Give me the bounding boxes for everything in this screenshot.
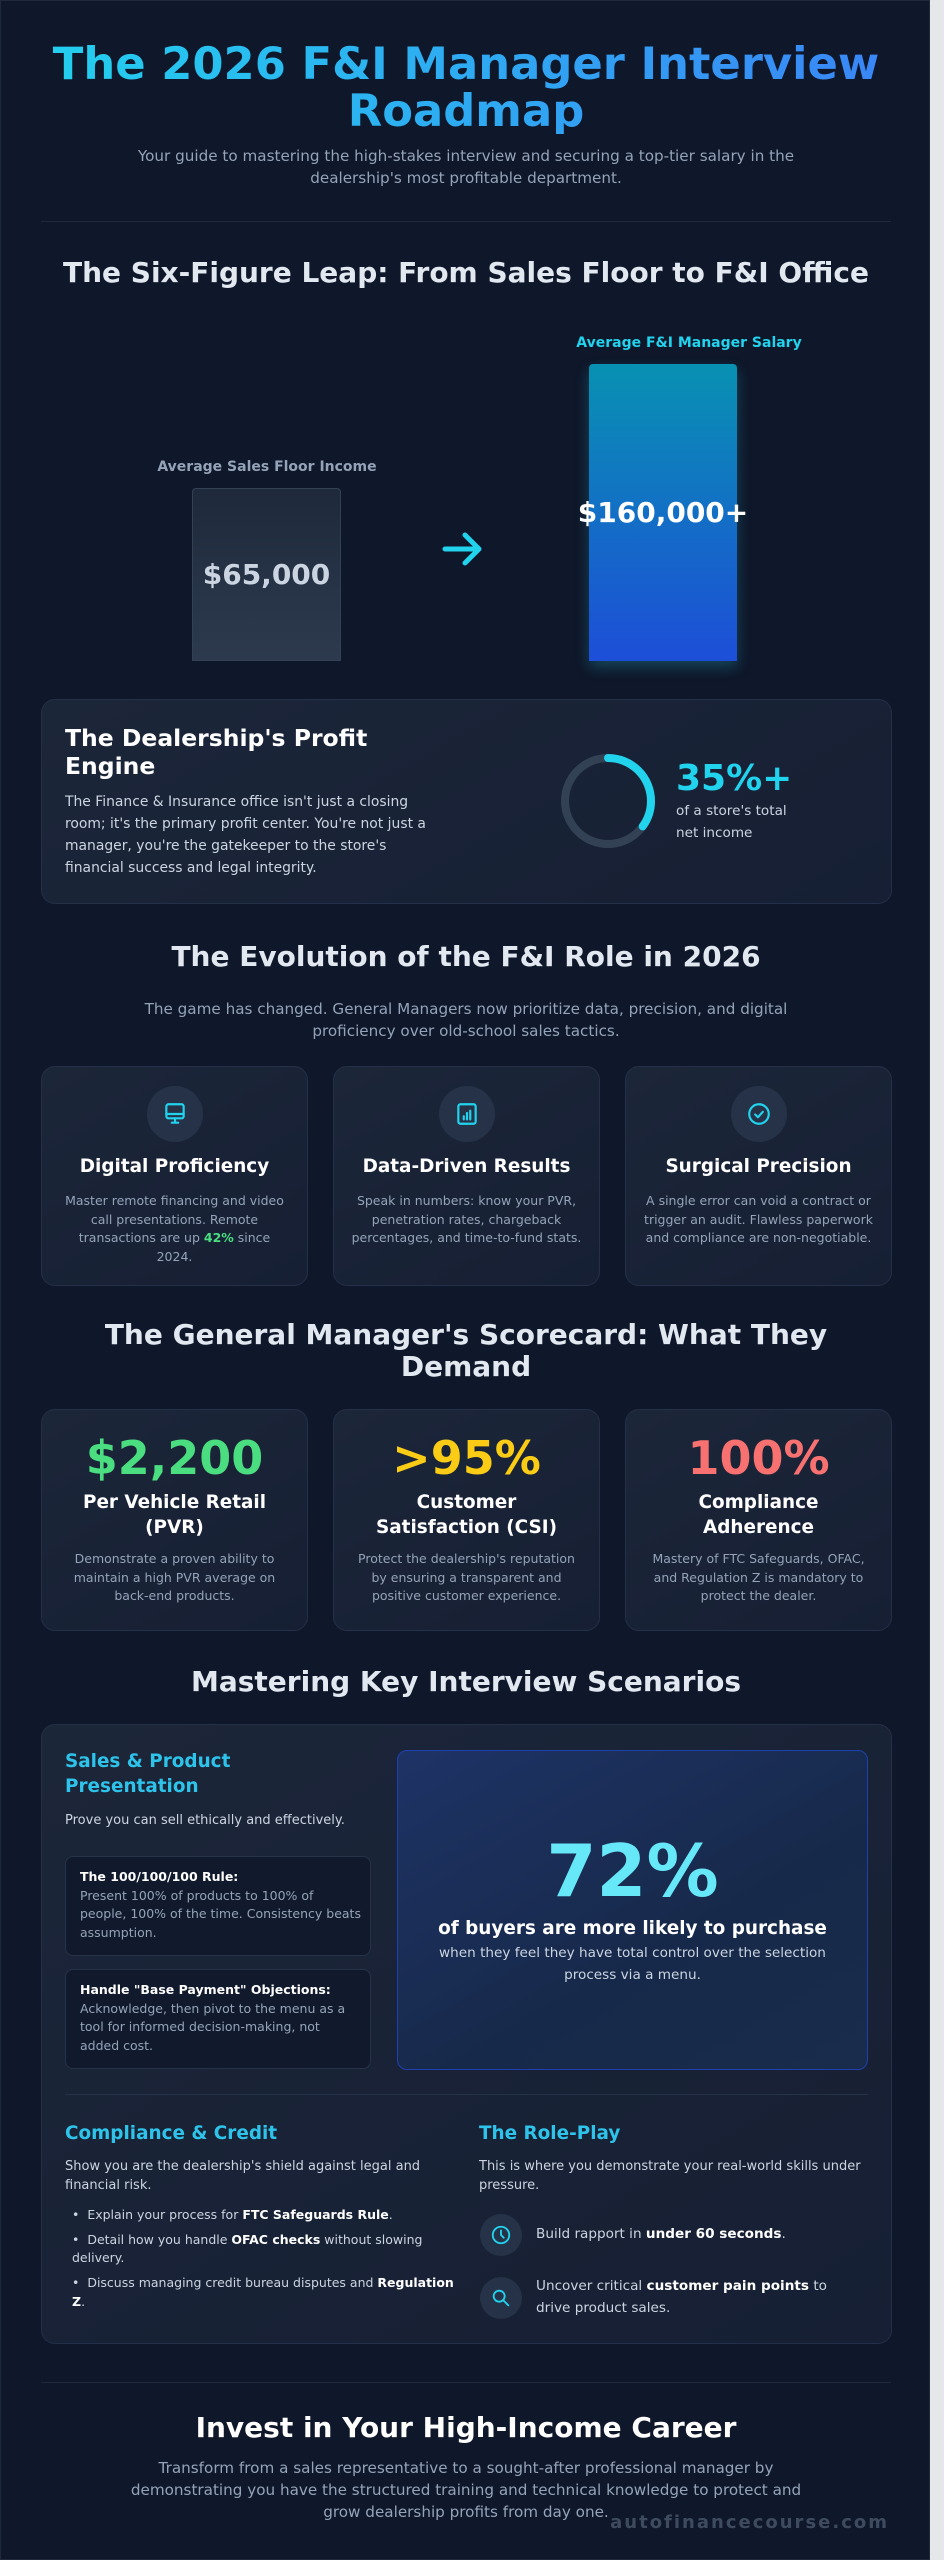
- stat: $2,200: [86, 1431, 263, 1485]
- description: [65, 1193, 284, 1264]
- description: 2024.: [157, 1249, 192, 1264]
- description: and Regulation Z is mandatory to: [654, 1570, 863, 1585]
- stat: >95%: [392, 1431, 541, 1485]
- heading: scorecard: Demand: [401, 1350, 531, 1383]
- box: 100/100/100 rule: assumption.: [80, 1925, 157, 1940]
- card: data-driven results: [333, 1066, 600, 1286]
- description: [74, 1551, 275, 1603]
- description: Demonstrate a proven ability to: [75, 1551, 274, 1566]
- title: Satisfaction (CSI): [376, 1517, 557, 1538]
- text: pain points: [536, 2278, 827, 2316]
- stat: 100%: [687, 1431, 830, 1485]
- title: Data-Driven Results: [363, 1156, 570, 1177]
- description: Protect the dealership's reputation: [358, 1551, 575, 1566]
- panel: profit engine: [41, 699, 892, 904]
- description: transactions are up 42% since: [79, 1230, 270, 1245]
- description: [644, 1193, 873, 1245]
- icon: clock: [480, 2214, 522, 2256]
- description: and compliance are non-negotiable.: [646, 1230, 871, 1245]
- list: compliance bullets: Z.: [72, 2294, 85, 2309]
- title: Adherence: [703, 1517, 814, 1538]
- card: compliance: [625, 1409, 892, 1631]
- text: compliance intro: [65, 2159, 420, 2193]
- heading: mastering scenarios: Mastering Key Interview Scenarios: [191, 1665, 741, 1698]
- stat: 35%+: net income: [676, 825, 752, 841]
- text: rapport: Build rapport in under 60 seconds.: [536, 2226, 786, 2242]
- text: role-play intro: This is where you demonstrate your real-world skills under: [479, 2159, 861, 2174]
- list: compliance bullets: [72, 2207, 454, 2309]
- box: 100/100/100 rule: Present 100% of products to 100% of: [80, 1888, 313, 1903]
- text: Prove you can sell ethically and effectively.: [65, 1813, 345, 1828]
- list: compliance bullets: delivery.: [72, 2250, 124, 2265]
- card: surgical precision: [625, 1066, 892, 1286]
- bar: $65,000: [192, 488, 341, 661]
- description: Master remote financing and video: [65, 1193, 284, 1208]
- box: base payment objections: Acknowledge, then pivot to the menu as a: [80, 2001, 345, 2016]
- title: [376, 1492, 557, 1538]
- heading: [65, 724, 367, 780]
- subtitle: evolution: proficiency over old-school sales tactics.: [312, 1022, 620, 1040]
- text: closing: Transform from a sales representative to a sought-after professional manager by: [159, 2459, 773, 2477]
- list: compliance bullets: • Explain your process for FTC Safeguards Rule.: [72, 2207, 393, 2222]
- card: PVR: [41, 1409, 308, 1631]
- box: base payment objections: added cost.: [80, 2038, 153, 2053]
- watermark: autofinancecourse.com: [610, 2512, 889, 2533]
- icon: check circle: [730, 1086, 786, 1142]
- description: [358, 1551, 575, 1603]
- bar: $65,000: $65,000: [203, 558, 330, 591]
- description: positive customer experience.: [372, 1588, 561, 1603]
- description: by ensuring a transparent and: [371, 1570, 562, 1585]
- box: 100/100/100 rule: people, 100% of the time. Consistency beats: [80, 1906, 361, 1921]
- text block: The Finance & Insurance office isn't just a closing: [65, 794, 408, 810]
- heading: invest: Invest in Your High-Income Career: [196, 2411, 736, 2444]
- title: [83, 1492, 266, 1538]
- heading: Engine: [65, 752, 155, 780]
- icon: monitor: [146, 1086, 202, 1142]
- heading: sales & product: [65, 1751, 230, 1797]
- heading: six-figure leap: The Six-Figure Leap: From Sales Floor to F&I Office: [63, 256, 869, 289]
- text: compliance intro: financial risk.: [65, 2178, 152, 2193]
- chart: salary comparison: [157, 335, 802, 674]
- stat: 35%+: [676, 758, 792, 841]
- description: [652, 1551, 865, 1603]
- description: percentages, and time-to-fund stats.: [352, 1230, 581, 1245]
- card: CSI: [333, 1409, 600, 1631]
- title: Compliance: [699, 1492, 818, 1513]
- description: protect the dealer.: [701, 1588, 816, 1603]
- box: 100/100/100 rule: [65, 1856, 371, 1956]
- title: Digital Proficiency: [80, 1156, 269, 1177]
- card: digital proficiency: [41, 1066, 308, 1286]
- text block: manager, you're the gatekeeper to the store's: [65, 838, 386, 854]
- text: closing: grow dealership profits from day one.: [323, 2503, 609, 2521]
- callout: 72% stat: process via a menu.: [564, 1967, 701, 1983]
- text: closing: [131, 2459, 801, 2521]
- bar: $160,000+: [589, 364, 737, 661]
- icon: search: [480, 2277, 522, 2319]
- list: compliance bullets: • Discuss managing credit bureau disputes and Regulation: [72, 2275, 454, 2290]
- stat: 35%+: 35%+: [676, 758, 792, 799]
- title: [699, 1492, 818, 1538]
- title: Surgical Precision: [665, 1156, 852, 1177]
- label: F&I salary: Average F&I Manager Salary: [576, 335, 802, 351]
- heading: scorecard: [105, 1318, 827, 1383]
- text block: financial success and legal integrity.: [65, 860, 317, 876]
- box: base payment objections: Handle "Base Payment" Objections:: [80, 1982, 331, 1997]
- text: role-play intro: pressure.: [479, 2178, 539, 2193]
- description: maintain a high PVR average on: [74, 1570, 275, 1585]
- heading: sales & product: Sales & Product: [65, 1751, 230, 1772]
- description: Speak in numbers: know your PVR,: [357, 1193, 576, 1208]
- subtitle: evolution: [144, 1000, 787, 1040]
- description: trigger an audit. Flawless paperwork: [644, 1212, 873, 1227]
- title: [1, 40, 931, 134]
- stat: 35%+: of a store's total: [676, 803, 787, 819]
- title: (PVR): [145, 1517, 204, 1538]
- description: back-end products.: [114, 1588, 235, 1603]
- panel: interview scenarios: [41, 1724, 892, 2344]
- text block: [64, 794, 426, 876]
- description: call presentations. Remote: [91, 1212, 258, 1227]
- box: base payment objections: [65, 1969, 371, 2069]
- icon: bar chart: [438, 1086, 494, 1142]
- text block: room; it's the primary profit center. You're not just a: [65, 816, 426, 832]
- title: Per Vehicle Retail: [83, 1492, 266, 1513]
- description: [352, 1193, 581, 1245]
- description: A single error can void a contract or: [646, 1193, 871, 1208]
- heading: scorecard: The General Manager's Scorecard: What They: [105, 1318, 827, 1351]
- callout: 72% stat: when they feel they have total control over the selection: [439, 1945, 826, 1961]
- box: base payment objections: tool for informed decision-making, not: [80, 2019, 320, 2034]
- list: compliance bullets: • Detail how you handle OFAC checks without slowing: [72, 2232, 422, 2247]
- label: sales floor income: Average Sales Floor Income: [157, 459, 377, 475]
- bar: $160,000+: $160,000+: [578, 496, 748, 529]
- heading: sales & product: Presentation: [65, 1776, 199, 1797]
- subtitle: evolution: The game has changed. General Managers now prioritize data, precision, and digital: [145, 1000, 787, 1018]
- heading: The Dealership's Profit: [65, 724, 367, 752]
- subtitle: Your guide to mastering the high-stakes interview and securing a top-tier salary in the: [138, 147, 794, 165]
- text: role-play intro: [478, 2159, 861, 2193]
- subtitle: [138, 147, 794, 187]
- text: pain points: drive product sales.: [536, 2300, 670, 2316]
- description: penetration rates, chargeback: [372, 1212, 561, 1227]
- heading: role-play: The Role-Play: [479, 2123, 620, 2144]
- heading: compliance & credit: Compliance & Credit: [65, 2123, 277, 2144]
- title: The 2026 F&I Manager Interview: [53, 37, 879, 90]
- arrow: [442, 532, 482, 566]
- text: pain points: Uncover critical customer pain points to: [536, 2278, 827, 2294]
- box: 100/100/100 rule: The 100/100/100 Rule:: [80, 1869, 238, 1884]
- text: compliance intro: Show you are the dealership's shield against legal and: [65, 2159, 420, 2174]
- text: closing: demonstrating you have the structured training and technical knowledge to protect and: [131, 2481, 801, 2499]
- description: Mastery of FTC Safeguards, OFAC,: [652, 1551, 865, 1566]
- title: Roadmap: [348, 84, 584, 137]
- donut chart: 35%: [561, 754, 655, 848]
- subtitle: dealership's most profitable department.: [310, 169, 622, 187]
- callout: 72% stat: of buyers are more likely to purchase: [438, 1918, 827, 1939]
- callout: 72% stat: 72%: [546, 1829, 719, 1913]
- heading: evolution: The Evolution of the F&I Role in 2026: [171, 940, 761, 973]
- callout: 72% stat: [397, 1750, 868, 2070]
- title: Customer: [417, 1492, 516, 1513]
